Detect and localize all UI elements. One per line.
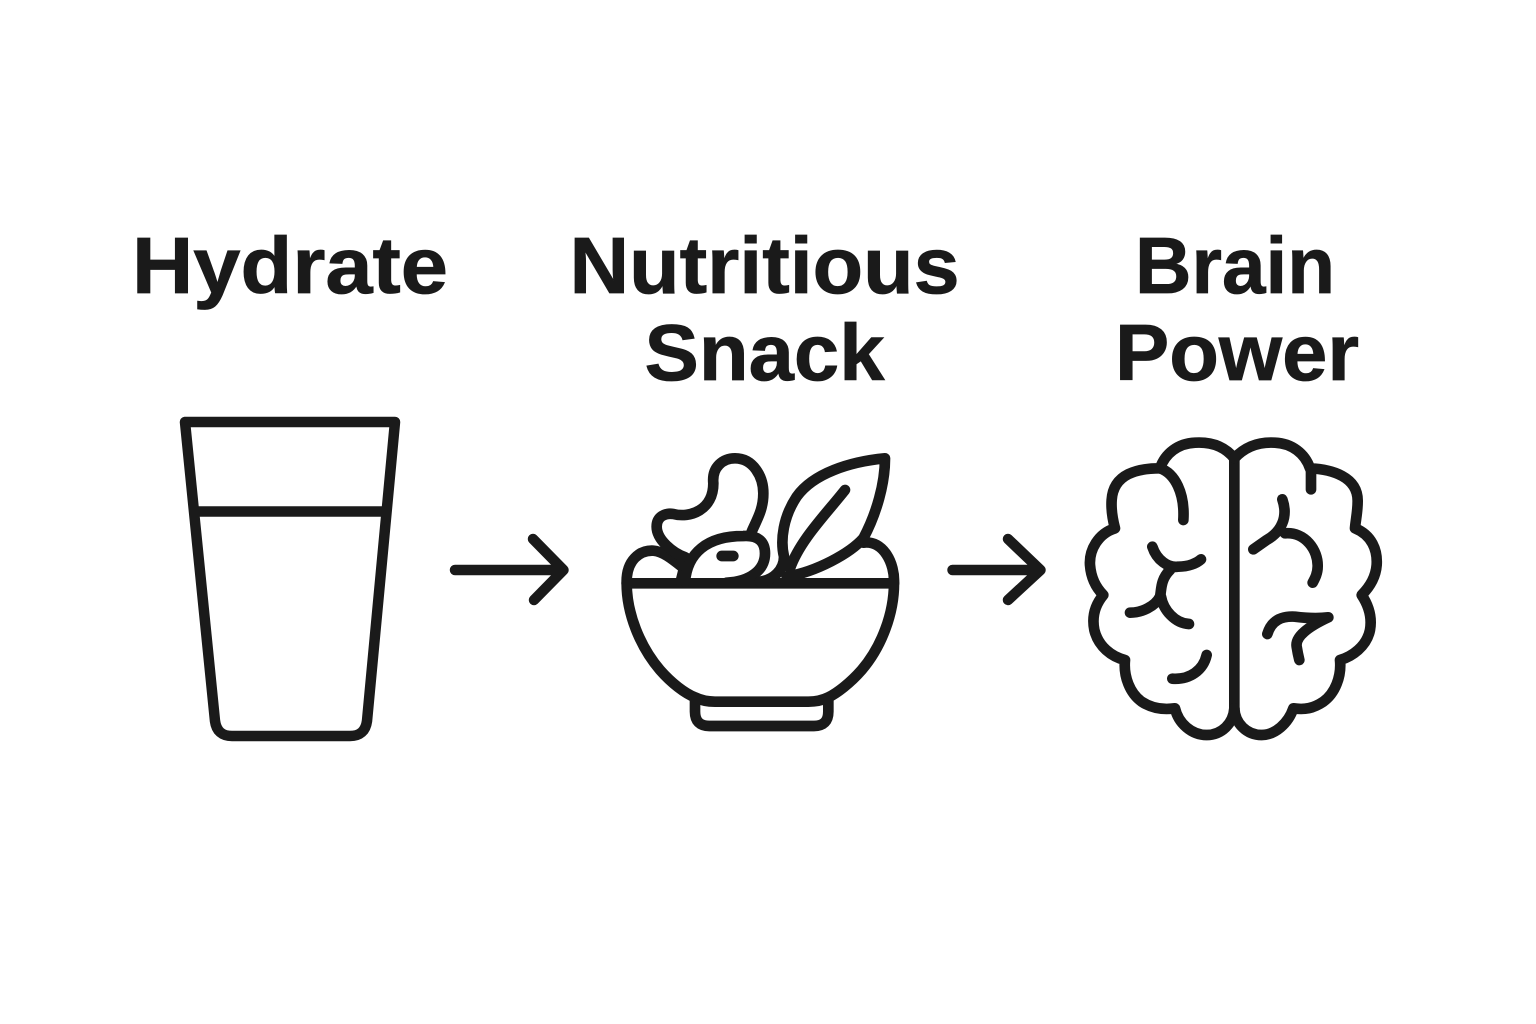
right food [863, 542, 894, 583]
left food [627, 551, 684, 583]
icon: brain [1090, 443, 1377, 735]
heading: Brain Power [1115, 221, 1359, 397]
heading: Nutritious Snack: Snack [644, 308, 885, 397]
bowl body and rim [627, 583, 894, 702]
arrow: snack to brain [952, 539, 1040, 600]
icon: glass of water [185, 422, 395, 736]
icon: snack bowl [627, 458, 894, 726]
left folds [1130, 468, 1207, 679]
right hemisphere [1234, 443, 1377, 735]
arrow: hydrate to snack [455, 539, 564, 600]
heading: Nutritious Snack [570, 221, 960, 397]
heading: Brain Power: Brain [1135, 221, 1335, 310]
centre line [1218, 460, 1250, 710]
heading: Brain Power: Power [1115, 308, 1359, 397]
heading: Nutritious Snack: Nutritious [570, 221, 960, 310]
left hemisphere [1090, 443, 1234, 735]
leaf vein [790, 490, 845, 568]
nut spot [722, 540, 733, 572]
bowl base [695, 698, 828, 726]
cashew [657, 458, 763, 557]
nut [685, 536, 765, 583]
heading: Hydrate: Hydrate [132, 221, 448, 310]
right folds [1253, 470, 1328, 660]
leaf [760, 458, 885, 582]
